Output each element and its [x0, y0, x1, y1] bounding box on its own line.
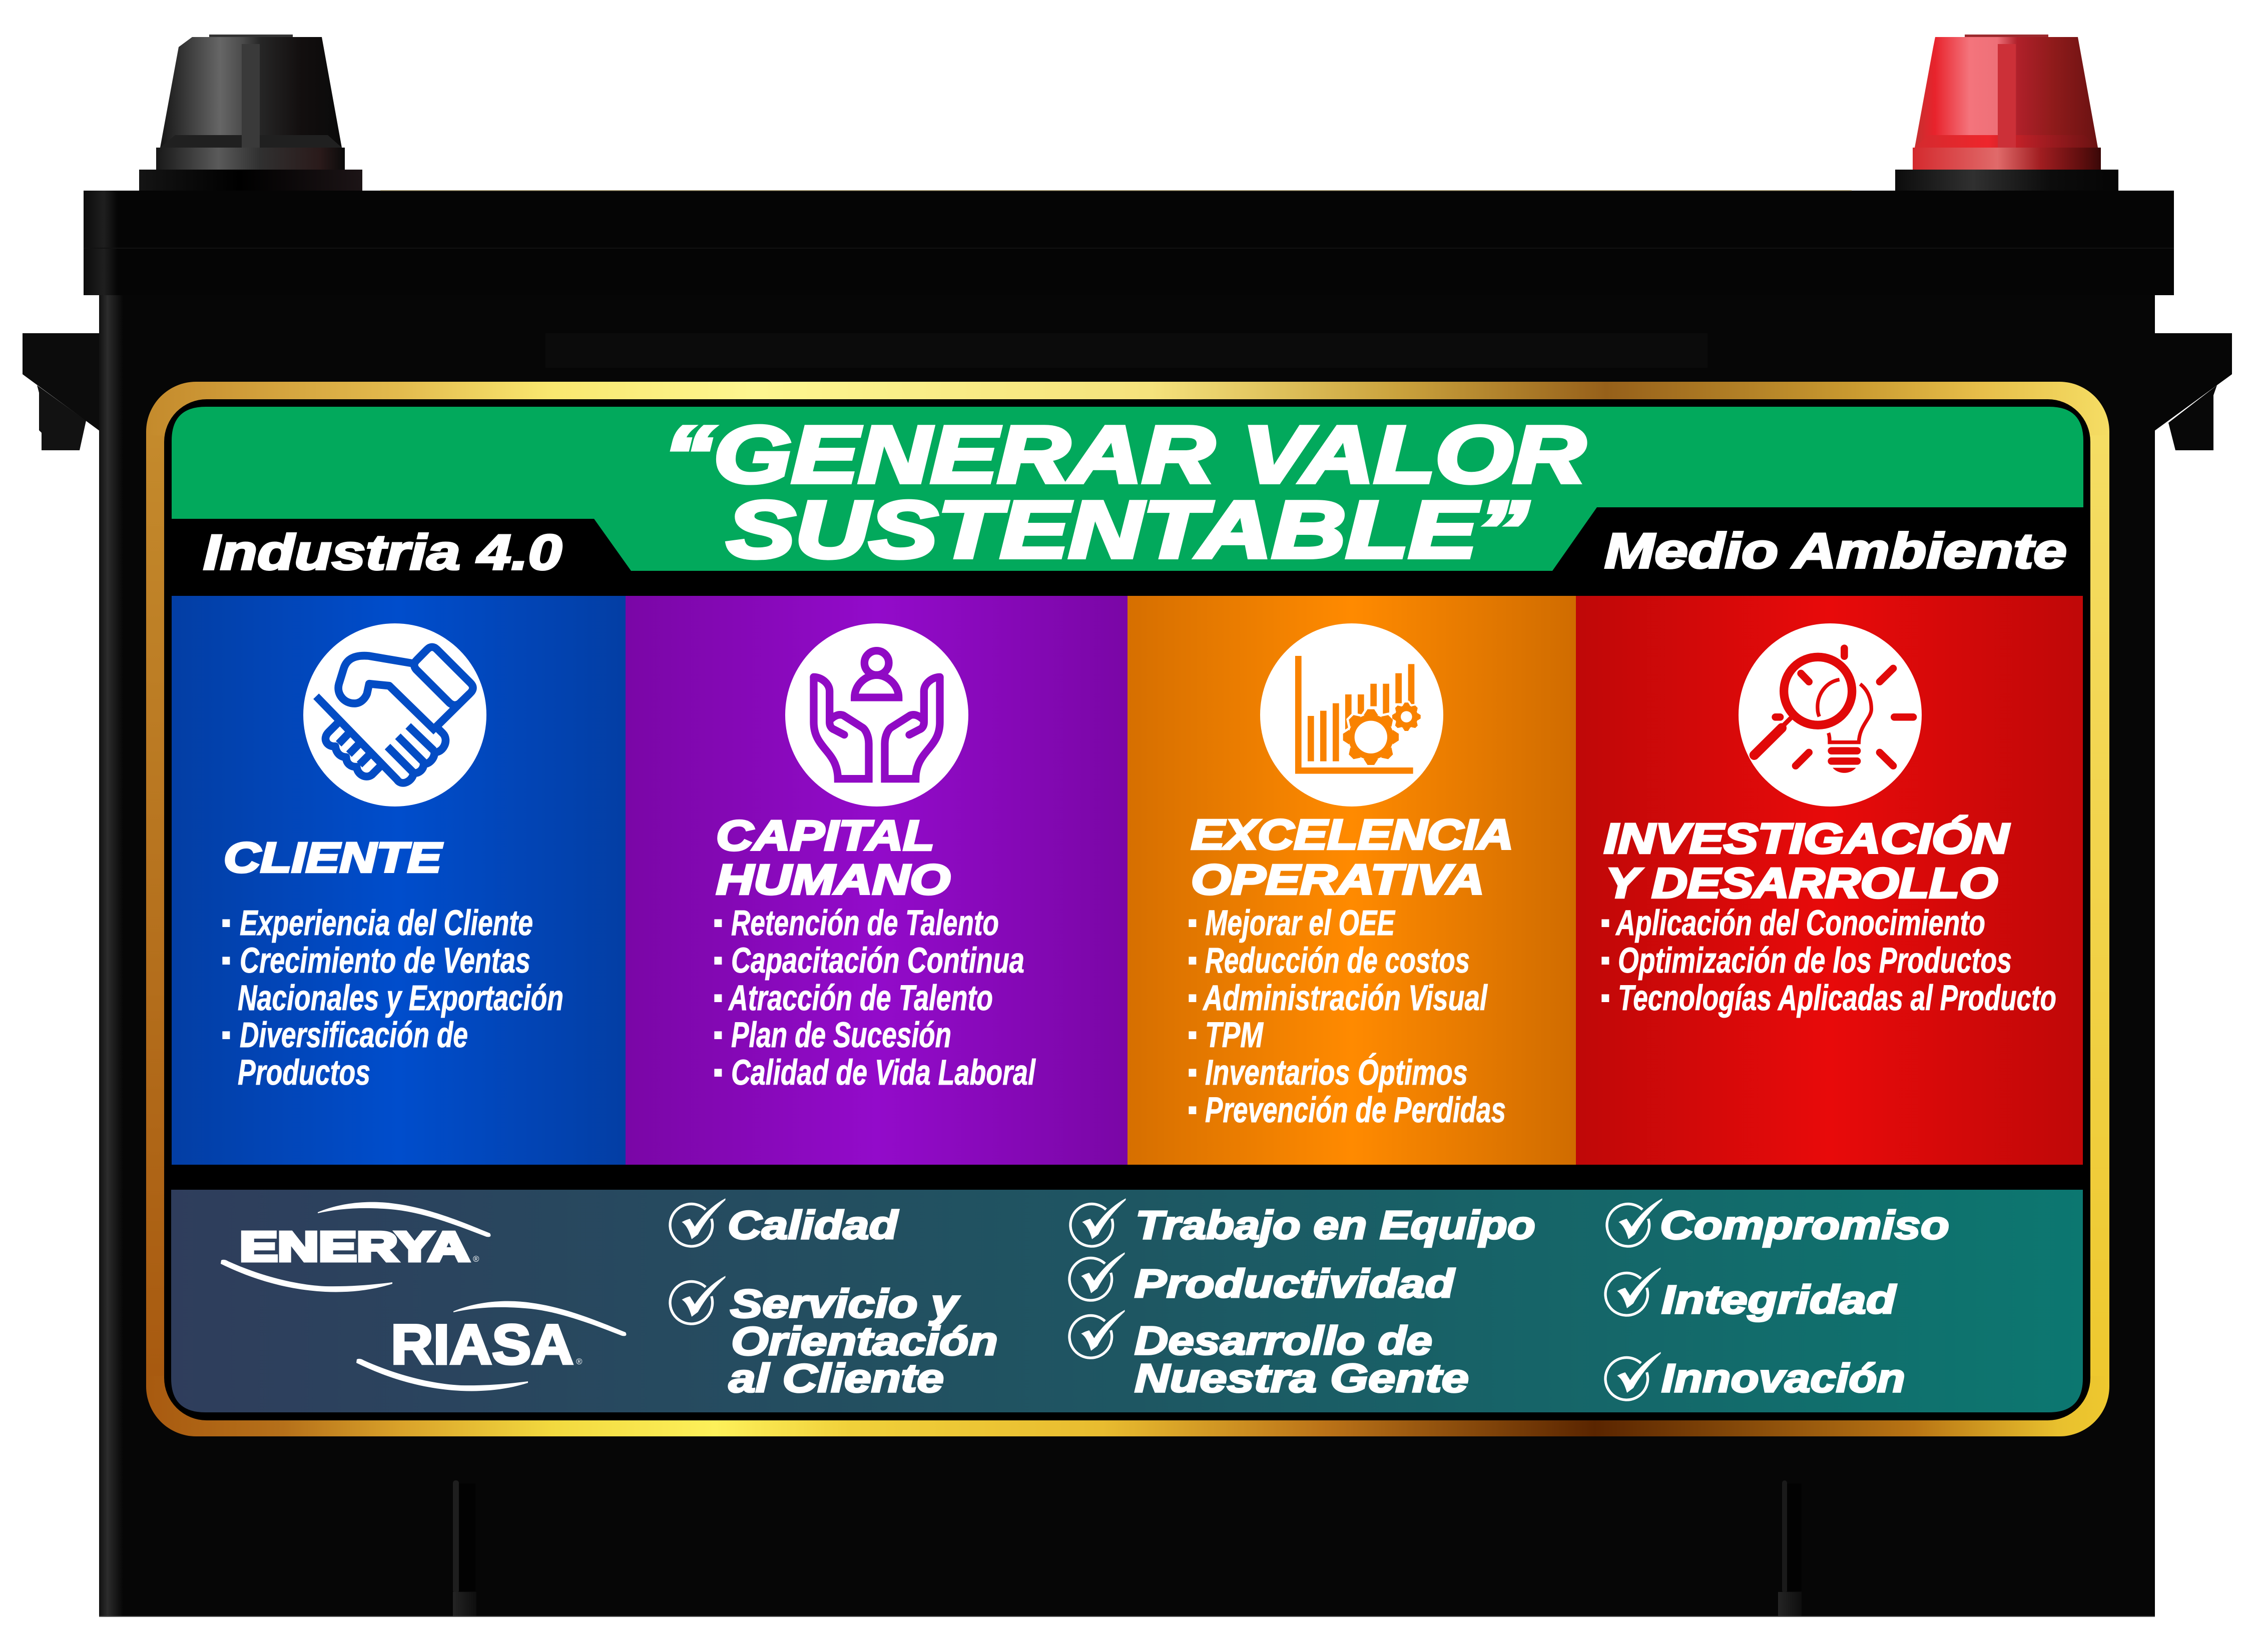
list: cliente: · [221, 1016, 233, 1055]
icon: handshake [303, 623, 486, 806]
list: excelencia operativa: · [1188, 1091, 1200, 1130]
black inner frame [164, 399, 2090, 1420]
list: excelencia operativa: · [1188, 979, 1200, 1018]
list: cliente: Productos [238, 1053, 370, 1093]
list: cliente: · [221, 904, 233, 943]
list: excelencia operativa: Mejorar el OEE [1205, 904, 1396, 943]
list: capital humano: Calidad de Vida Laboral [731, 1053, 1036, 1093]
value: Desarrollo de Nuestra Gente [1069, 1310, 1469, 1400]
list: cliente: Diversificación de [240, 1016, 468, 1055]
list: investigacion y desarrollo [1600, 904, 2056, 1018]
value: Servicio y Orientacion al Cliente [670, 1276, 998, 1400]
list: capital humano: Plan de Sucesión [731, 1016, 951, 1055]
lid recessed label strip [545, 333, 1708, 368]
right side clip [2154, 333, 2232, 450]
value: Trabajo en Equipo [1070, 1199, 1535, 1247]
left side clip [23, 333, 100, 450]
list: investigacion y desarrollo: Optimización de los Productos [1618, 941, 2012, 981]
value: Integridad [1605, 1268, 1897, 1322]
list: cliente: Experiencia del Cliente [240, 904, 533, 943]
value: Compromiso: Compromiso [1660, 1203, 1949, 1247]
heading: excelencia operativa: OPERATIVA [1191, 856, 1484, 903]
list: cliente [221, 904, 563, 1093]
value: Servicio y Orientacion al Cliente: al Cliente [729, 1356, 944, 1400]
heading: investigacion y desarrollo: INVESTIGACIÓN [1604, 815, 2010, 862]
logo: Riasa [356, 1301, 626, 1391]
logo: Enerya: ENERYA [240, 1223, 469, 1270]
list: capital humano: Capacitación Continua [731, 941, 1024, 981]
list: excelencia operativa: Inventarios Óptimos [1205, 1053, 1468, 1093]
heading: cliente: CLIENTE [224, 834, 443, 881]
list: excelencia operativa: Administración Visual [1202, 979, 1488, 1018]
heading: excelencia operativa [1191, 811, 1513, 903]
value: Trabajo en Equipo: Trabajo en Equipo [1136, 1203, 1535, 1247]
list: capital humano: · [713, 1016, 725, 1055]
lid left highlight [84, 191, 118, 295]
lower left handle slot [453, 1480, 476, 1617]
logo: Enerya: ® [473, 1254, 479, 1264]
list: capital humano: Atracción de Talento [728, 979, 993, 1018]
case [99, 295, 2155, 1617]
list: investigacion y desarrollo: · [1600, 979, 1612, 1018]
list: investigacion y desarrollo: · [1600, 941, 1612, 981]
value: Desarrollo de Nuestra Gente: Desarrollo de [1135, 1318, 1432, 1363]
label: Industria 4.0: Industria 4.0 [203, 524, 562, 580]
value: Calidad: Calidad [728, 1203, 899, 1247]
list: capital humano: · [713, 941, 725, 981]
list: cliente: Nacionales y Exportación [238, 979, 563, 1018]
lid [84, 191, 2174, 295]
heading: capital humano [716, 812, 950, 903]
lower right handle slot [1778, 1480, 1802, 1617]
label: Medio Ambiente: Medio Ambiente [1604, 523, 2067, 578]
title [664, 410, 1585, 575]
logo: Enerya [221, 1202, 490, 1292]
heading: capital humano: CAPITAL [716, 812, 934, 859]
value: Integridad: Integridad [1661, 1277, 1897, 1322]
title: “GENERAR VALOR [664, 410, 1585, 500]
logo: Riasa: RIASA [391, 1313, 574, 1376]
panel: excelencia operativa [1128, 596, 1576, 1165]
icon: chart with gears [1260, 623, 1443, 806]
value: Productividad: Productividad [1135, 1261, 1456, 1306]
list: excelencia operativa: Prevención de Perdidas [1205, 1091, 1506, 1130]
list: excelencia operativa [1188, 904, 1506, 1130]
list: investigacion y desarrollo: · [1600, 904, 1612, 943]
heading: capital humano: HUMANO [716, 856, 950, 903]
list: excelencia operativa: TPM [1205, 1016, 1264, 1055]
value: Calidad [670, 1199, 899, 1247]
list: excelencia operativa: · [1188, 904, 1200, 943]
positive terminal [1895, 35, 2118, 191]
list: excelencia operativa: · [1188, 941, 1200, 981]
green title banner [172, 407, 2083, 571]
heading: investigacion y desarrollo [1604, 815, 2010, 907]
list: excelencia operativa: Reducción de costos [1205, 941, 1470, 981]
value: Productividad [1069, 1253, 1456, 1306]
value: Compromiso [1607, 1199, 1949, 1247]
list: excelencia operativa: · [1188, 1016, 1200, 1055]
heading: excelencia operativa: EXCELENCIA [1191, 811, 1513, 858]
logo: Riasa: ® [576, 1357, 583, 1366]
panel: investigacion y desarrollo [1576, 596, 2083, 1165]
list: cliente: Crecimiento de Ventas [240, 941, 530, 981]
list: cliente: · [221, 941, 233, 981]
list: capital humano: Retención de Talento [731, 904, 999, 943]
value: Desarrollo de Nuestra Gente: Nuestra Gente [1135, 1356, 1469, 1400]
list: investigacion y desarrollo: Tecnologías Aplicadas al Producto [1618, 979, 2056, 1018]
list: capital humano: · [713, 979, 725, 1018]
title: SUSTENTABLE” [727, 485, 1529, 575]
list: capital humano [713, 904, 1036, 1093]
panel: capital humano [626, 596, 1128, 1165]
list: capital humano: · [713, 1053, 725, 1093]
panel: cliente [172, 596, 626, 1165]
list: investigacion y desarrollo: Aplicación del Conocimiento [1615, 904, 1985, 943]
negative terminal [139, 35, 362, 191]
value: Innovacion [1605, 1352, 1905, 1400]
case left highlight [99, 295, 123, 1617]
list: capital humano: · [713, 904, 725, 943]
panel: values and logos [171, 1190, 2083, 1412]
list: excelencia operativa: · [1188, 1053, 1200, 1093]
value: Servicio y Orientacion al Cliente: Servicio y [730, 1281, 960, 1326]
gold frame [146, 382, 2109, 1436]
icon: magnifier and light bulb [1739, 623, 1922, 806]
value: Servicio y Orientacion al Cliente: Orientación [731, 1319, 998, 1363]
icon: hands holding person [785, 623, 968, 806]
value: Innovacion: Innovación [1661, 1356, 1905, 1400]
label panel [146, 382, 2109, 1436]
heading: investigacion y desarrollo: Y DESARROLLO [1606, 860, 1998, 907]
